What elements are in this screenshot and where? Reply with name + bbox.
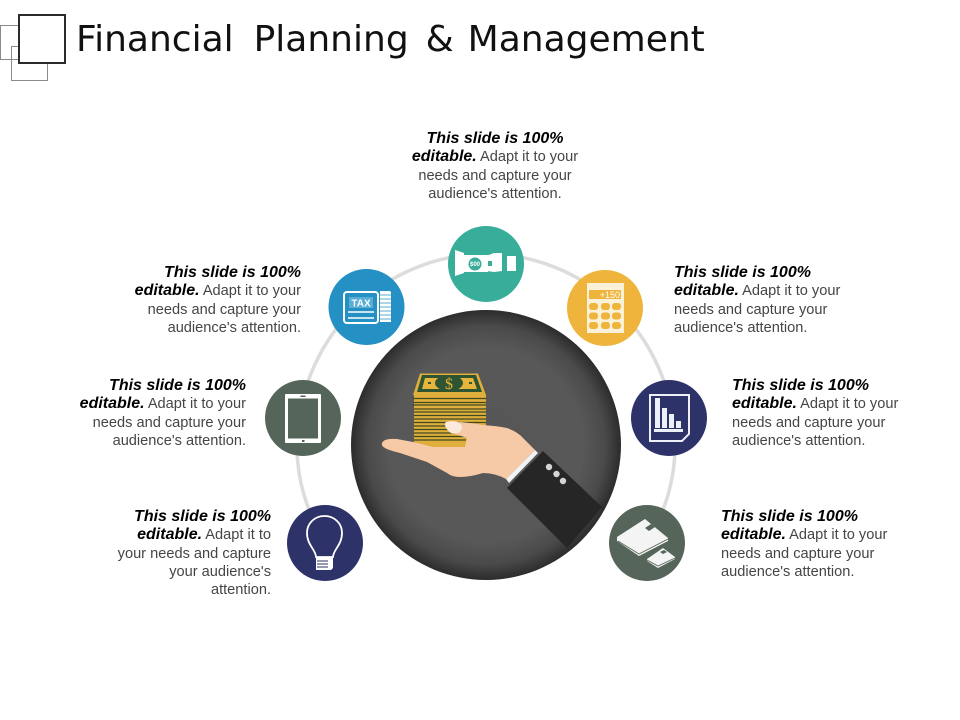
- text block: middle left: needs and capture your: [93, 415, 246, 431]
- text block: lower left: your audience's: [169, 564, 271, 580]
- icon: calculator: [567, 270, 643, 346]
- text block: upper left: editable. Adapt it to your: [135, 282, 301, 299]
- text block: upper right: This slide is 100%: [674, 264, 811, 281]
- text block: top: audience's attention.: [428, 186, 562, 202]
- text block: top: needs and capture your: [418, 168, 572, 184]
- hand: [382, 421, 602, 548]
- icon: books: [609, 505, 685, 581]
- text block: middle right: This slide is 100%: [732, 377, 869, 394]
- text block: upper left: needs and capture your: [148, 302, 301, 318]
- icon: cash hand: $00: [470, 262, 481, 268]
- text block: upper left: This slide is 100%: [164, 264, 301, 281]
- title: Financial Planning & Management: [76, 19, 705, 60]
- text block: middle left: [80, 377, 246, 449]
- central circle: [351, 310, 621, 580]
- text block: lower left: your needs and capture: [118, 546, 271, 562]
- text block: middle right: audience's attention.: [732, 433, 865, 449]
- text block: lower left: [118, 508, 271, 598]
- text block: middle right: editable. Adapt it to your: [732, 395, 898, 412]
- text block: upper right: [674, 264, 840, 336]
- text block: lower left: editable. Adapt it to: [137, 526, 271, 543]
- icon: bar chart document: [631, 380, 707, 456]
- text block: middle left: audience's attention.: [113, 433, 246, 449]
- icon: cash hand: [448, 226, 524, 302]
- icon: tablet: [265, 380, 341, 456]
- icon: title squares: [0, 14, 66, 81]
- icon: light bulb: [287, 505, 363, 581]
- icon: calculator: +150: [600, 290, 620, 300]
- text block: middle right: needs and capture your: [732, 415, 885, 431]
- text block: middle right: [732, 377, 898, 449]
- text block: lower left: This slide is 100%: [134, 508, 271, 525]
- text block: middle left: editable. Adapt it to your: [80, 395, 246, 412]
- icon: tax document: TAX: [351, 298, 371, 310]
- icon: tax document: [328, 269, 404, 345]
- text block: middle left: This slide is 100%: [109, 377, 246, 394]
- text block: upper right: needs and capture your: [674, 302, 827, 318]
- text block: upper right: audience's attention.: [674, 320, 807, 336]
- text block: upper right: editable. Adapt it to your: [674, 282, 840, 299]
- text block: lower right: This slide is 100%: [721, 508, 858, 525]
- text block: lower left: attention.: [211, 582, 271, 598]
- text block: upper left: [135, 264, 301, 336]
- money stack: $: [445, 376, 453, 393]
- text block: top: This slide is 100%: [427, 130, 563, 147]
- money stack: [413, 374, 486, 447]
- text block: lower right: [721, 508, 888, 580]
- connecting arc: [297, 254, 675, 541]
- text block: lower right: audience's attention.: [721, 564, 854, 580]
- text block: top: [412, 130, 578, 202]
- text block: top: editable. Adapt it to your: [412, 148, 578, 165]
- text block: upper left: audience's attention.: [168, 320, 301, 336]
- text block: lower right: needs and capture your: [721, 546, 874, 562]
- text block: lower right: editable. Adapt it to your: [721, 526, 887, 543]
